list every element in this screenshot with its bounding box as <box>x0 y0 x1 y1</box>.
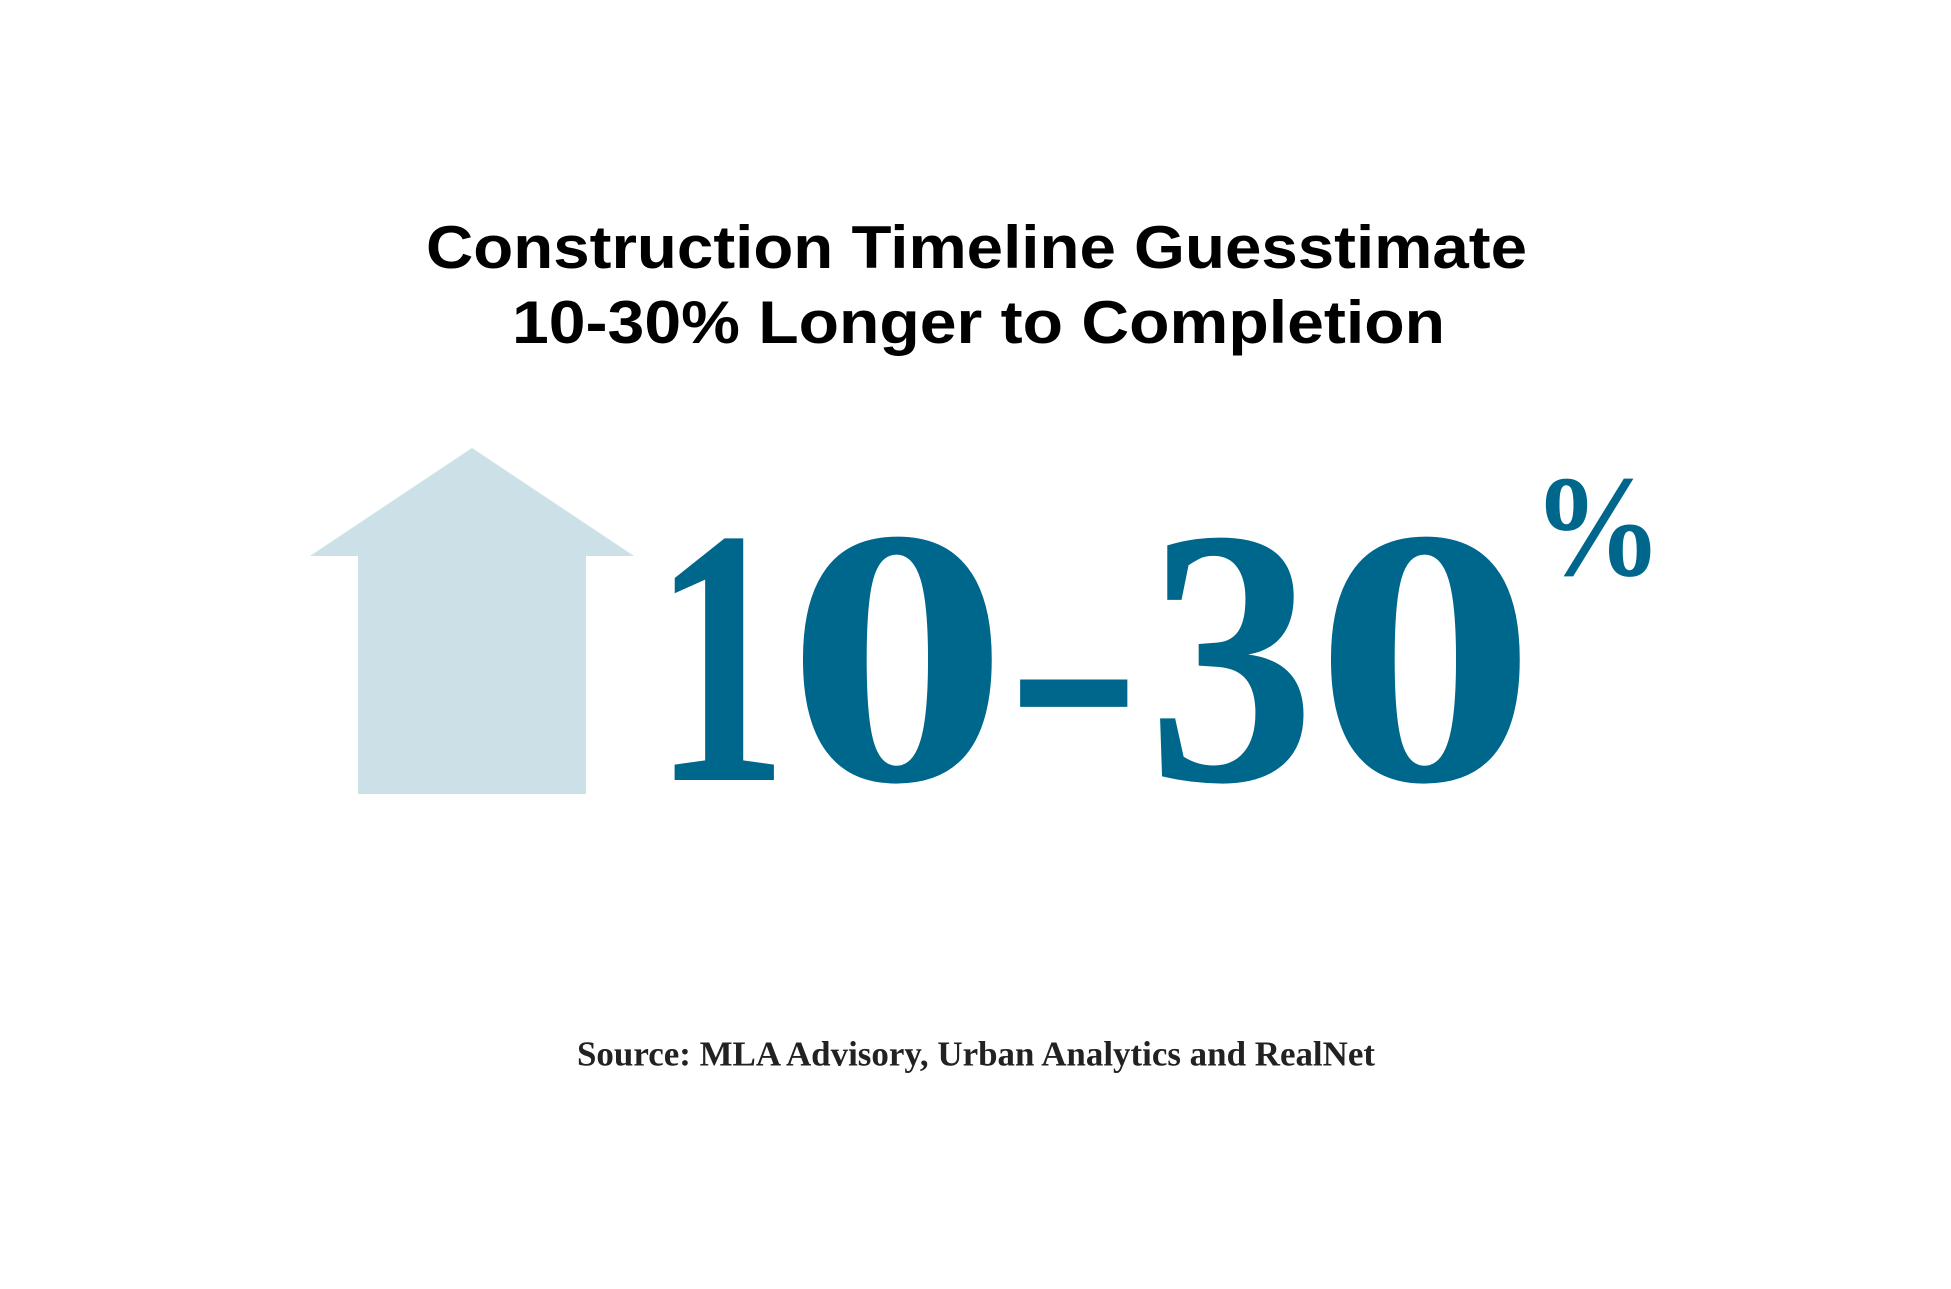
percent sign: % <box>1532 446 1663 607</box>
big number 10-30 percent: 0 <box>1314 455 1537 860</box>
big number 10-30 percent: 1 <box>653 454 788 860</box>
title: Construction Timeline Guesstimate <box>426 214 1527 281</box>
source note: Source: MLA Advisory, Urban Analytics and RealNet <box>577 1034 1375 1074</box>
title: 10-30% Longer to Completion <box>512 289 1445 356</box>
big number 10-30 percent <box>653 446 1663 860</box>
big number 10-30 percent: 0 <box>786 455 1009 860</box>
title <box>426 214 1527 356</box>
big number 10-30 percent: - <box>1005 483 1142 839</box>
big number 10-30 percent: 3 <box>1148 453 1315 859</box>
icon: up arrow <box>310 448 634 794</box>
